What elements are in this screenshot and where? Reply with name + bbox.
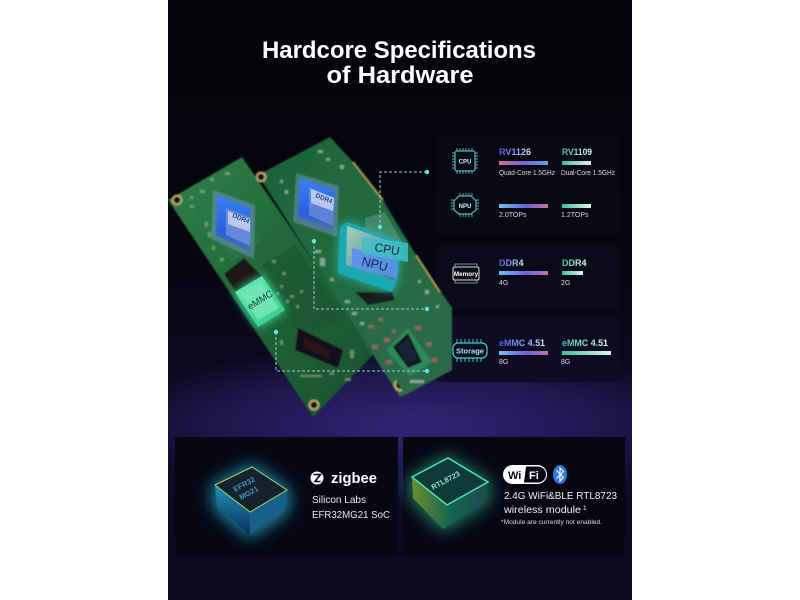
title: Hardcore Specifications [262, 37, 536, 64]
spec: storage 8G second: 8G [561, 359, 570, 366]
spec: CPU RV1109 [561, 147, 615, 177]
SoC chip [393, 333, 422, 368]
wireless module description: wireless module [503, 504, 581, 516]
zigbee wordmark: zigbee [331, 470, 377, 487]
spec: CPU RV1126 [499, 147, 555, 177]
spec: memory 2G: 2G [561, 280, 570, 287]
icon: Wi-Fi badge: Fi [529, 470, 539, 482]
spec: memory 4G: 4G [499, 280, 508, 287]
spec: NPU 1.2TOPs: 1.2TOPs [561, 212, 589, 219]
spec: storage 8G first: 8G [499, 359, 508, 366]
icon: RTL8723 chip: RTL8723 [430, 469, 462, 492]
CPU and NPU chip overlay [338, 212, 408, 292]
icon: CPU: CPU [459, 160, 471, 166]
spec: CPU RV1109: Dual-Core 1.5GHz [561, 170, 615, 177]
panel: zigbee [175, 437, 398, 555]
panel: memory background [436, 245, 620, 310]
NPU label plate: NPU [360, 254, 389, 274]
connector dots [274, 170, 429, 373]
zigbee description: Silicon Labs [312, 494, 366, 506]
panel: storage background [436, 317, 620, 382]
icon: memory [453, 264, 479, 283]
zigbee description: EFR32MG21 SoC [312, 509, 390, 521]
icon: NPU [451, 193, 479, 217]
wireless module description: 1 [583, 505, 587, 512]
spec: storage 8G first: eMMC 4.51 [499, 338, 545, 348]
icon: Wi-Fi badge [503, 465, 547, 484]
spec: storage 8G second: eMMC 4.51 [562, 338, 608, 348]
wireless module description: 2.4G WiFi&BLE RTL8723 [504, 490, 617, 502]
spec: memory 4G [499, 258, 548, 287]
DDR4 chip overlay left [211, 190, 255, 259]
spec: memory 4G: DDR4 [499, 258, 524, 268]
eMMC chip overlay [235, 276, 285, 327]
wireless module description [503, 490, 617, 516]
eMMC chip overlay: eMMC [246, 288, 275, 313]
DDR4 chip overlay left: DDR4 [231, 212, 251, 226]
spec: NPU 2.0TOPs: 2.0TOPs [499, 212, 527, 219]
icon: EFR32MG21 chip: MG21 [238, 484, 260, 502]
icon: zigbee logo [310, 472, 324, 484]
icon: EFR32MG21 chip: EFR32 [232, 475, 257, 494]
RAM chip [295, 328, 343, 368]
spec: storage 8G second [561, 338, 611, 366]
DDR4 chip overlay right: DDR4 [314, 192, 334, 206]
circuit board illustration [168, 137, 452, 417]
footnote: *Module are currently not enabled. [501, 520, 602, 526]
spec: CPU RV1109: RV1109 [562, 147, 592, 157]
icon: Bluetooth [553, 465, 567, 484]
spec: memory 2G [561, 258, 587, 287]
DDR4 chip overlay right [293, 173, 339, 237]
title: of Hardware [326, 62, 474, 89]
spec: NPU 1.2TOPs [561, 204, 591, 219]
icon: CPU [452, 148, 478, 174]
icon: RTL8723 chip [409, 455, 491, 532]
poster background [168, 0, 632, 600]
back-left circuit board [168, 157, 376, 417]
icon: NPU: NPU [459, 204, 471, 210]
spec: CPU RV1126: Quad-Core 1.5GHz [499, 170, 555, 177]
panel: wifi and bluetooth [403, 437, 625, 555]
CPU label plate: CPU [373, 240, 401, 258]
spec: memory 2G: DDR4 [562, 258, 587, 268]
spec: storage 8G first [499, 338, 548, 366]
icon: storage [453, 339, 487, 362]
spec: CPU RV1126: RV1126 [499, 147, 531, 157]
icon: EFR32MG21 chip [212, 464, 290, 538]
spec: NPU 2.0TOPs [499, 204, 548, 219]
icon: Wi-Fi badge: Wi [508, 470, 521, 482]
zigbee description [312, 494, 390, 521]
dashed connector lines [276, 172, 427, 371]
icon: storage: Storage [456, 346, 484, 356]
title [262, 37, 536, 89]
panel: CPU and NPU background [436, 135, 620, 235]
front-right circuit board [256, 137, 452, 397]
icon: memory: Memory [454, 271, 479, 278]
